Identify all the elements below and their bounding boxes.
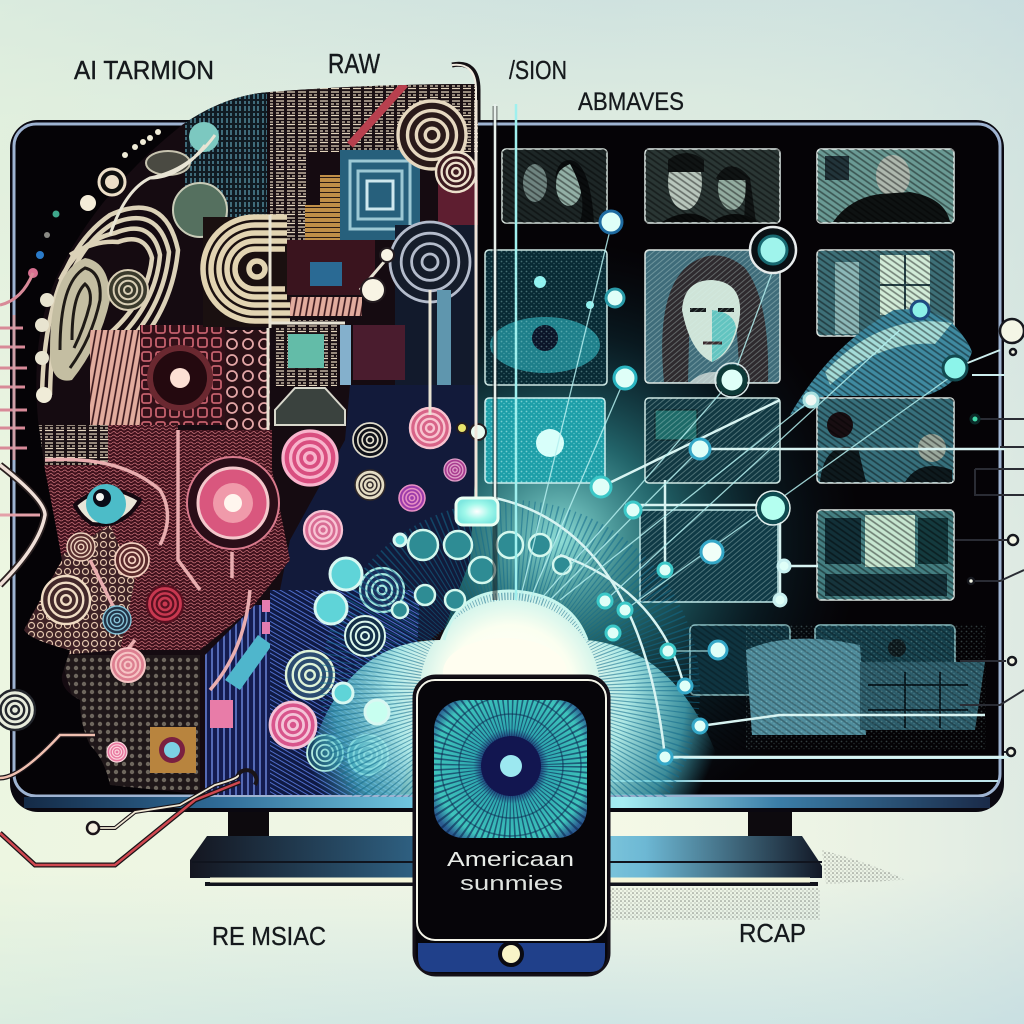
tablet [414, 676, 609, 975]
tablet bottom band [418, 943, 605, 972]
chin field [60, 655, 200, 790]
head base [36, 84, 478, 794]
node: lower face pink [111, 648, 145, 682]
tablet pupil [481, 736, 541, 796]
photo: man and woman [645, 149, 780, 223]
node: lower teal swirl [307, 735, 343, 771]
diagonal circuit teal [225, 635, 272, 690]
blue circuit [205, 605, 270, 795]
curving head wire [110, 135, 430, 430]
lobe lines [60, 268, 100, 368]
tablet image [434, 700, 587, 838]
tablet body [414, 676, 609, 975]
tablet iris rays [441, 696, 581, 836]
nose beige field [20, 525, 135, 655]
mid red block [285, 240, 375, 295]
octagon [275, 388, 345, 425]
photo: two people on sofa [817, 398, 954, 483]
photo: glowing field [485, 398, 605, 483]
node: face pink [147, 586, 183, 622]
node: nose swirl [42, 576, 90, 624]
lower screen lines [560, 758, 1004, 781]
tablet home button [500, 943, 522, 965]
label: Vision: /SION [509, 55, 567, 85]
teal square block [275, 320, 405, 386]
node: blue dark swirl [360, 568, 404, 612]
left ladder wires [0, 273, 45, 585]
large ring node: middle [756, 491, 790, 525]
node: mid swirl [286, 651, 334, 699]
vertical wires [452, 64, 516, 600]
photo: glowing eye network [485, 250, 607, 385]
cheek target node [150, 348, 210, 408]
pink lens [187, 457, 279, 549]
light rays burst [300, 550, 730, 830]
photo: library room [817, 510, 954, 600]
cream lower stripes [90, 330, 140, 425]
pink bars [262, 600, 270, 634]
node: mid pink [304, 511, 342, 549]
photo: woman portrait [645, 250, 780, 383]
node: brow swirl [67, 533, 95, 561]
teal cluster [315, 530, 571, 724]
hatch row [36, 425, 108, 465]
label: Remsiac: RE MSIAC [212, 921, 326, 951]
lobe filler [108, 270, 148, 310]
right outer nodes [968, 319, 1024, 756]
maroon grid block [140, 325, 225, 425]
node: chin pink [107, 742, 127, 762]
blue concentric square [340, 150, 420, 240]
right swirl [388, 220, 478, 385]
small icon block [270, 152, 306, 242]
photo: sofa living room [690, 625, 986, 750]
right wires [955, 350, 1024, 752]
blue swirl field [270, 590, 420, 795]
label: Raw: RAW [328, 48, 380, 79]
large ring node: portrait base [715, 363, 749, 397]
head border dots [28, 129, 161, 403]
monitor stand [190, 806, 905, 920]
big cream loop [203, 217, 290, 327]
panel: photo grid [485, 149, 986, 750]
glowing chip [456, 498, 498, 525]
node: teal ring [103, 606, 131, 634]
face maroon field [40, 430, 290, 650]
cream swirl nodes [42, 423, 404, 775]
node: dark swirl [353, 423, 387, 457]
pink swirl nodes [107, 408, 466, 762]
node: lower pink [270, 702, 316, 748]
label: AI Tarmion: AI TARMION [74, 55, 214, 85]
stippled upper sphere [173, 183, 227, 237]
yellow stepped block [305, 175, 340, 240]
large ring node: portrait [750, 227, 796, 273]
face and circuit head [24, 84, 478, 795]
tablet pupil light [500, 755, 522, 777]
photo: dark room band [640, 510, 778, 602]
tablet caption: Americaan [447, 849, 574, 871]
tablet outline [417, 680, 606, 940]
brain outer stripes [42, 208, 178, 405]
left swirl node [0, 690, 35, 730]
teal ball [189, 122, 219, 152]
lower wires [0, 735, 256, 865]
second swirl [436, 152, 476, 192]
photo: older man in room [817, 149, 954, 223]
node: small purple right [444, 459, 466, 481]
node: lower teal swirl right [348, 735, 388, 775]
photo: sweeping bed [790, 309, 972, 415]
large teal circles [315, 534, 406, 724]
upper textured strip [185, 92, 267, 227]
label: Abmaves: ABMAVES [578, 88, 684, 116]
glowing nodes [591, 211, 979, 764]
node: upper pink [283, 431, 337, 485]
node: small purple [399, 485, 425, 511]
tablet caption second line: sunmies [460, 873, 563, 895]
eye [75, 484, 140, 524]
monitor frame [10, 120, 1004, 812]
photo: room with window [817, 250, 954, 336]
pink window [210, 700, 233, 728]
pink rings column [225, 330, 270, 435]
node: central pink [410, 408, 450, 448]
cluster small swirls [392, 530, 571, 618]
pink contour lines [45, 430, 250, 690]
red swirl block [438, 180, 478, 230]
blue inset [310, 262, 342, 286]
white circuit nodes [361, 248, 486, 440]
connector arcs [495, 222, 1010, 757]
top tile block [270, 84, 478, 152]
cluster swirl rings [345, 616, 385, 656]
tile bar [290, 297, 362, 316]
red diagonal [350, 84, 405, 145]
label: Rcap: RCAP [739, 918, 806, 948]
node: upper cream swirl [355, 470, 385, 500]
top swirl [398, 101, 466, 169]
orange icon square [150, 727, 196, 773]
brain lobe [50, 258, 110, 381]
node: cheek swirl [115, 543, 149, 577]
hatched oval [146, 151, 190, 175]
photo: dark film scene [645, 398, 780, 483]
photo: two women [502, 149, 607, 223]
navy field [270, 385, 478, 640]
central glow [220, 200, 900, 797]
maroon row [108, 425, 178, 465]
